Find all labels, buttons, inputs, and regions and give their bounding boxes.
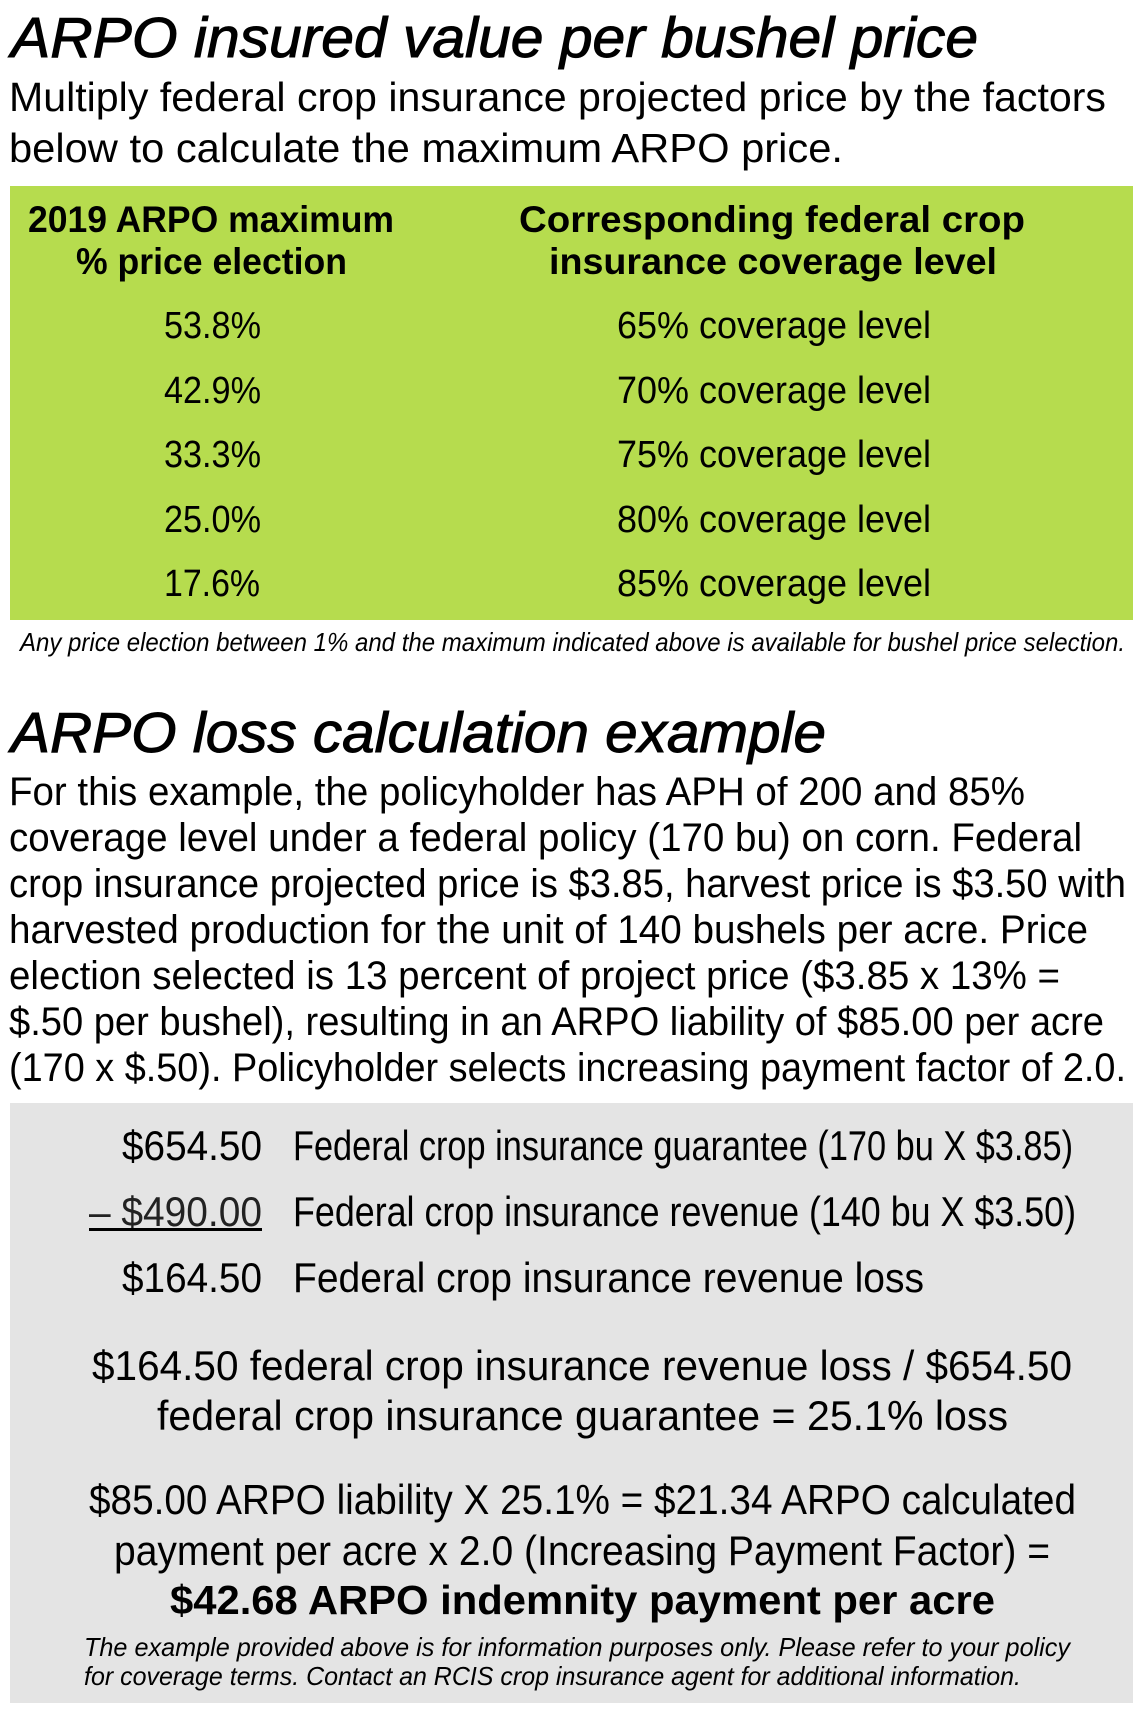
disclaimer [84,1632,1072,1691]
calculation rows: Federal crop insurance revenue loss [293,1254,924,1301]
panel: price election table [10,186,1133,620]
column heading: price election: % price election [76,241,347,282]
table rows: 80% coverage level [617,499,931,541]
intro text [9,74,1106,171]
example paragraph: harvested production for the unit of 140 bushels per acre. Price [9,908,1088,952]
column heading: coverage level [519,199,1025,282]
column heading: coverage level: insurance coverage level [549,241,997,282]
calculation rows: – $490.00 [89,1188,262,1235]
calculation rows: $654.50 [122,1122,262,1169]
table rows: 53.8% [164,305,261,347]
example paragraph: coverage level under a federal policy (170 bu) on corn. Federal [9,816,1082,860]
calculation rows: $164.50 [122,1254,262,1301]
example paragraph: election selected is 13 percent of project price ($3.85 x 13% = [9,954,1060,998]
loss percentage calculation: $164.50 federal crop insurance revenue loss / $654.50 [92,1342,1072,1389]
indemnity calculation: $85.00 ARPO liability X 25.1% = $21.34 ARPO calculated [89,1476,1076,1523]
column heading: price election: 2019 ARPO maximum [28,199,394,240]
table rows: 65% coverage level [617,305,931,347]
loss percentage calculation [92,1342,1072,1439]
table rows: 25.0% [164,499,261,541]
title: ARPO insured value per bushel price [8,6,978,70]
example paragraph: For this example, the policyholder has APH of 200 and 85% [9,770,1025,814]
intro text: below to calculate the maximum ARPO price. [9,125,843,171]
title: ARPO loss calculation example [8,701,826,765]
table rows: 75% coverage level [617,434,931,476]
disclaimer: The example provided above is for information purposes only. Please refer to your policy [84,1632,1072,1662]
panel: worked calculation [10,1103,1133,1703]
example paragraph [9,770,1126,1090]
table rows: 17.6% [164,563,260,605]
section: insured value [8,6,1133,657]
column heading: price election [28,199,394,282]
section: loss calculation [8,701,1133,1703]
indemnity calculation: payment per acre x 2.0 (Increasing Payment Factor) = [114,1527,1050,1574]
column heading: coverage level: Corresponding federal crop [519,199,1025,240]
loss percentage calculation: federal crop insurance guarantee = 25.1% loss [157,1392,1008,1439]
table rows: 70% coverage level [617,370,931,412]
indemnity calculation: $42.68 ARPO indemnity payment per acre [170,1577,995,1623]
indemnity calculation [89,1476,1076,1623]
intro text: Multiply federal crop insurance projected price by the factors [9,74,1106,120]
example paragraph: $.50 per bushel), resulting in an ARPO liability of $85.00 per acre [9,1000,1104,1044]
table rows: 85% coverage level [617,563,931,605]
disclaimer: for coverage terms. Contact an RCIS crop insurance agent for additional information. [84,1661,1021,1691]
table rows: 33.3% [164,434,261,476]
table rows [164,305,931,605]
table rows: 42.9% [164,370,261,412]
calculation rows [89,1122,1076,1301]
example paragraph: crop insurance projected price is $3.85, harvest price is $3.50 with [9,862,1126,906]
